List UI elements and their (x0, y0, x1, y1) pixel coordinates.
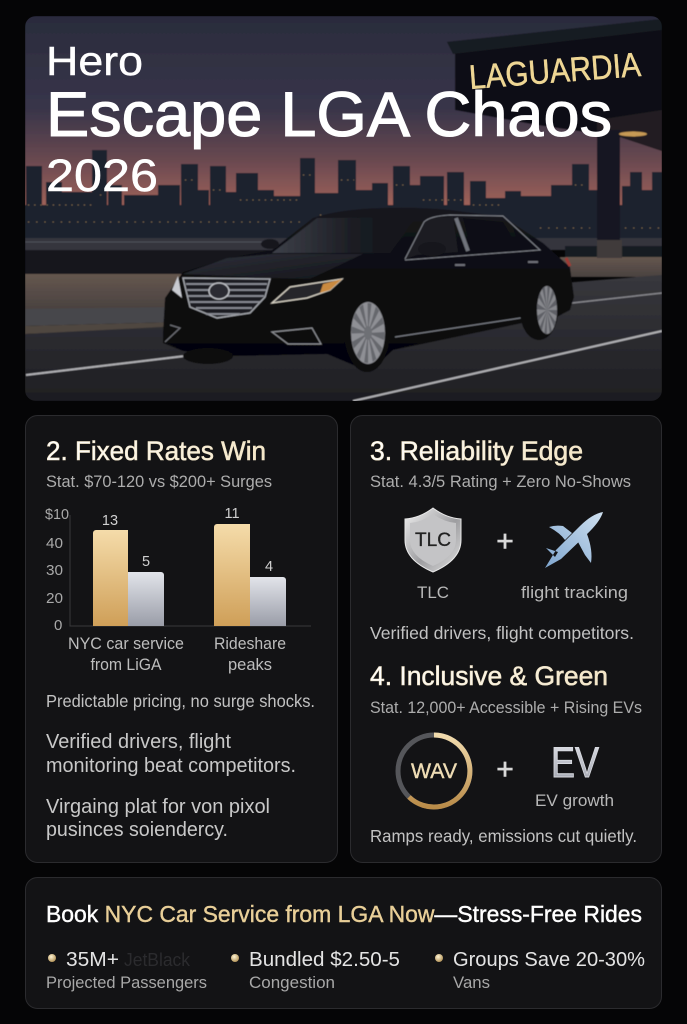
label: EV growth: EV growth (535, 791, 614, 810)
stat: accessible: Stat. 12,000+ Accessible + Rising EVs (370, 698, 642, 717)
stat: fare comparison: Stat. $70-120 vs $200+ Surges (46, 472, 272, 491)
stat: passengers: JetBlack (124, 950, 191, 970)
heading: Hero: Hero (46, 38, 143, 84)
heading: reliability edge: 3. Reliability Edge (370, 436, 583, 466)
bar chart: fares: from LiGA (90, 655, 162, 674)
text: garbled line: pusinces soiendercy. (46, 819, 228, 841)
bar chart: fares: 30 (46, 562, 63, 579)
panel: fixed rates (26, 416, 338, 862)
rear wheel (520, 282, 558, 340)
text: predictable pricing: Predictable pricing, no surge shocks. (46, 691, 315, 711)
label: TLC: TLC (417, 583, 449, 602)
bar chart: fares: peaks (228, 655, 272, 674)
icon: WAV ring: WAV (411, 760, 457, 783)
text: verified drivers: Verified drivers, flight competitors. (370, 623, 634, 643)
stat: passengers: 35M+ (66, 949, 119, 971)
front wheel (344, 301, 390, 372)
terminal canopy (454, 30, 662, 132)
icon: WAV ring (398, 735, 470, 807)
bar chart: fares (45, 506, 311, 674)
text: verified drivers: monitoring beat competitors. (46, 755, 296, 777)
stat: groups: Groups Save 20-30% (453, 949, 645, 971)
heading: inclusive and green: 4. Inclusive & Green (370, 661, 608, 691)
heading: Escape LGA Chaos: Escape LGA Chaos (46, 80, 612, 150)
stat: congestion (231, 949, 400, 992)
stat: congestion: Bundled $2.50-5 (249, 949, 400, 971)
bar chart: fares: 40 (46, 535, 63, 552)
waterfront (25, 238, 662, 250)
icon: TLC shield: TLC (415, 530, 451, 551)
label: flight tracking: flight tracking (521, 583, 628, 602)
stat: rating: Stat. 4.3/5 Rating + Zero No-Shows (370, 472, 631, 491)
icon: TLC shield (405, 508, 461, 572)
bar chart: fares: $10 (45, 506, 69, 523)
heading: book now: Book NYC Car Service from LGA Now—Stress-Free Rides (46, 901, 642, 927)
icon: plus: + (496, 525, 514, 558)
stat: groups: Vans (453, 973, 490, 992)
heading: 2026: 2026 (46, 150, 158, 201)
bar chart: fares: Rideshare (214, 634, 286, 653)
bar chart: fares: 4 (265, 559, 273, 575)
panel: hero (25, 16, 662, 401)
lane markings (26, 331, 662, 401)
stat: passengers: Projected Passengers (46, 973, 207, 992)
text: verified drivers (46, 731, 296, 777)
text: ramps: Ramps ready, emissions cut quietly. (370, 826, 637, 846)
panel: reliability and inclusive (350, 416, 662, 862)
text: garbled line (46, 796, 270, 841)
road (25, 275, 662, 401)
panel: call to action (26, 878, 662, 1008)
icon: plus: + (496, 753, 514, 786)
city lights (28, 175, 662, 228)
bar chart: fares: 20 (46, 590, 63, 607)
bar chart: fares: NYC car service (68, 634, 184, 653)
bar chart: fares: 0 (54, 617, 62, 634)
hero photo: airport skyline and black sedan (25, 16, 662, 401)
icon: plane (545, 512, 603, 568)
bar chart: fares: 11 (224, 506, 240, 522)
stat: groups (435, 949, 645, 992)
sidewalk (25, 307, 180, 326)
concrete barrier (25, 274, 185, 309)
sedan (163, 208, 574, 372)
sign: LaGuardia: LAGUARDIA (468, 46, 642, 97)
stat: passengers (46, 949, 207, 992)
city skyline (25, 150, 662, 247)
stat: congestion: Congestion (249, 973, 335, 992)
heading: fixed rates win: 2. Fixed Rates Win (46, 436, 266, 466)
icon: EV: EV (551, 739, 599, 787)
bar chart: fares: 5 (142, 554, 150, 570)
text: verified drivers: Verified drivers, flight (46, 731, 231, 753)
bar chart: fares: 13 (102, 513, 118, 529)
text: garbled line: Virgaing plat for von pixol (46, 796, 270, 818)
